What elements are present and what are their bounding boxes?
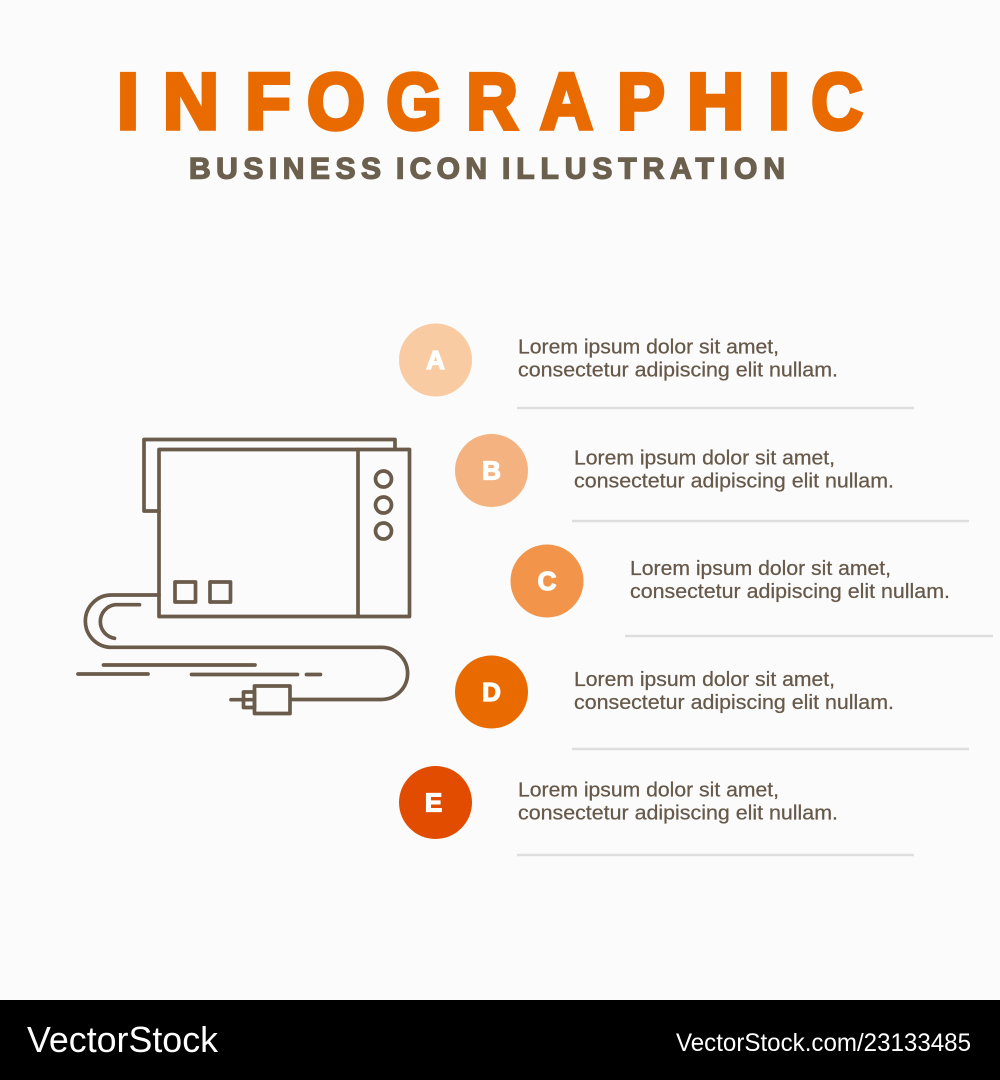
title: O [307, 58, 365, 146]
cable [85, 595, 408, 700]
text A: consectetur adipiscing elit nullam. [518, 358, 838, 382]
text E [518, 778, 838, 824]
badge A: A [426, 345, 445, 375]
title: N [163, 57, 219, 146]
text D: Lorem ipsum dolor sit amet, [574, 668, 835, 691]
badge E: E [425, 788, 442, 818]
badge C [510, 544, 584, 618]
badge D [455, 656, 528, 728]
plug [231, 686, 290, 714]
front panel of tablet [159, 450, 410, 616]
text E: Lorem ipsum dolor sit amet, [518, 778, 779, 802]
badge A [399, 324, 472, 396]
icon: graphics tablet with cable [78, 440, 410, 714]
item E [399, 766, 914, 855]
title: H [687, 56, 744, 146]
text C: Lorem ipsum dolor sit amet, [630, 557, 891, 580]
item C [510, 544, 993, 636]
text B: Lorem ipsum dolor sit amet, [574, 446, 835, 470]
tablet buttons: circles [376, 471, 392, 539]
title: R [466, 57, 518, 145]
footer image id: VectorStock.com/23133485 [676, 1029, 971, 1057]
footer logo: VectorStock [27, 1019, 219, 1060]
title: C [811, 57, 863, 145]
badge D: D [482, 677, 501, 707]
title: G [386, 57, 442, 145]
side strip divider [356, 450, 360, 616]
back panel of tablet [144, 440, 395, 511]
footer bar [0, 1000, 1000, 1080]
subtitle: BUSINESS [189, 152, 381, 185]
badge E [399, 766, 472, 839]
item B [455, 434, 969, 521]
text D: consectetur adipiscing elit nullam. [574, 691, 894, 714]
title: P [617, 57, 665, 145]
motion lines [78, 665, 320, 674]
text D [574, 668, 894, 714]
title: I [768, 56, 790, 146]
cable inner highlight [100, 605, 140, 638]
text C [630, 557, 950, 603]
text B: consectetur adipiscing elit nullam. [574, 470, 894, 492]
subtitle [189, 152, 785, 185]
title: I [117, 56, 139, 146]
text C: consectetur adipiscing elit nullam. [630, 580, 950, 603]
badge C: C [538, 566, 557, 596]
text E: consectetur adipiscing elit nullam. [518, 802, 838, 824]
badge B: B [482, 456, 501, 486]
item A [399, 324, 914, 408]
title [117, 56, 863, 146]
title: F [245, 58, 291, 146]
text A: Lorem ipsum dolor sit amet, [518, 336, 779, 358]
title: A [540, 58, 593, 146]
badge B [455, 434, 528, 507]
subtitle: ICON [396, 152, 487, 185]
subtitle: ILLUSTRATION [502, 152, 785, 185]
text B [574, 446, 894, 492]
tablet buttons: squares [175, 582, 230, 602]
text A [518, 336, 838, 382]
item D [455, 656, 969, 749]
